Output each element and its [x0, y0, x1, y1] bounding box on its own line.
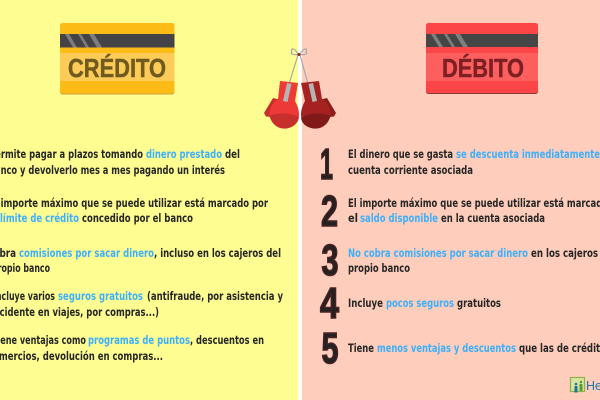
- débito point 2: el: [348, 211, 358, 225]
- débito point 2: [348, 196, 600, 225]
- débito point 5: Tiene: [348, 341, 374, 355]
- crédito point 2: [0, 196, 268, 225]
- débito point 4: gratuitos: [457, 296, 501, 310]
- débito point 5: menos ventajas y descuentos: [377, 341, 516, 355]
- crédito point 5: [0, 333, 264, 363]
- text block: débito points: [348, 147, 600, 355]
- crédito point 3: comisiones por sacar dinero: [19, 246, 154, 260]
- débito point 2: saldo disponible: [360, 211, 438, 225]
- crédito point 2: límite de crédito: [0, 211, 79, 225]
- heading: débito: DÉBITO: [442, 53, 524, 83]
- numbers 1 to 5: [320, 140, 339, 373]
- heading: crédito: CRÉDITO: [68, 53, 166, 83]
- numbers 1 to 5: 3: [322, 236, 338, 285]
- icon: boxing gloves: [264, 49, 336, 129]
- débito point 4: pocos seguros: [386, 296, 454, 310]
- crédito point 4: seguros gratuitos: [58, 289, 143, 303]
- crédito point 5: , descuentos en: [190, 333, 264, 347]
- débito point 3: propio banco: [348, 261, 410, 275]
- débito point 3: [348, 246, 600, 275]
- crédito point 5: programas de puntos: [88, 333, 190, 347]
- crédito point 3: , incluso en los cajeros del: [154, 246, 281, 260]
- logo: HelpMyCash: [570, 378, 600, 393]
- numbers 1 to 5: 1: [320, 140, 333, 189]
- débito point 1: cuenta corriente asociada: [348, 163, 473, 177]
- crédito point 1: [0, 147, 240, 177]
- débito point 2: en la cuenta asociada: [441, 211, 545, 225]
- crédito point 1: dinero prestado: [146, 147, 222, 161]
- débito point 1: El dinero que se gasta: [348, 147, 453, 161]
- débito point 4: Incluye: [348, 296, 383, 310]
- numbers 1 to 5: 2: [321, 187, 338, 236]
- numbers 1 to 5: 5: [322, 324, 338, 373]
- crédito point 4: [0, 289, 283, 319]
- crédito point 2: concedido por el banco: [82, 211, 193, 225]
- panel: crédito background: [0, 0, 298, 400]
- débito point 1: [348, 147, 600, 177]
- crédito point 4: (antifraude, por asistencia y: [147, 289, 283, 303]
- débito point 4: [348, 296, 501, 310]
- text block: crédito points: [0, 147, 283, 363]
- crédito point 1: del: [225, 147, 240, 161]
- débito point 3: No cobra comisiones por sacar dinero: [348, 246, 528, 260]
- panel: débito background: [302, 0, 600, 400]
- icon: crédito card: [60, 23, 174, 94]
- numbers 1 to 5: 4: [320, 279, 339, 328]
- crédito point 3: [0, 246, 281, 275]
- crédito point 2: El importe máximo que se puede utilizar está marcado por: [0, 196, 268, 210]
- icon: débito card: [426, 23, 538, 94]
